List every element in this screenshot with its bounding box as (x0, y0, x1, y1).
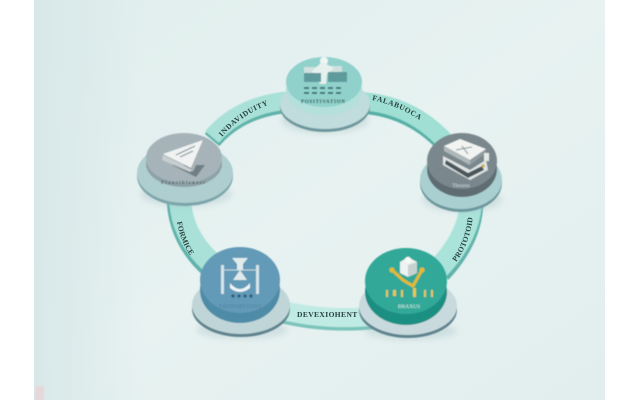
band: lower-right (438, 200, 472, 272)
label: top-left band: INDAVIDUITY (218, 100, 267, 137)
ring connector bands (178, 100, 472, 321)
label: bottom-right node: BRAXUS (398, 304, 420, 310)
band labels (177, 95, 472, 319)
node: bottom-right (359, 248, 457, 340)
band: lower-left (178, 195, 214, 268)
label: bottom band: DEVEXIOHENT (297, 310, 358, 319)
label: top-right band: FALABUOCA (372, 95, 420, 120)
label: left node: Plausibleness (161, 181, 205, 186)
band: bottom (270, 307, 385, 321)
label: top node: POSITIVATION (301, 100, 345, 105)
label: lower-left band: FORMICE (177, 221, 194, 256)
label: right node: Thrurus (452, 183, 470, 189)
icon: stacked tablets (443, 139, 489, 180)
node: right (420, 133, 502, 212)
icon: folded triangle (162, 140, 205, 177)
icon: balance frame (221, 258, 259, 298)
band: top-right (360, 101, 444, 143)
label: bottom-left node: PROPORTIONS (219, 305, 261, 310)
artefact: bottom-left mark (35, 386, 44, 400)
icon: cube and golden links (386, 257, 433, 297)
icon: figure on blocks (304, 57, 347, 94)
node: left (137, 133, 233, 207)
band: top-left (212, 100, 292, 140)
label: lower-right band: PROTOTOID (452, 218, 472, 262)
node: top (280, 57, 370, 134)
node: bottom-left (192, 247, 290, 339)
